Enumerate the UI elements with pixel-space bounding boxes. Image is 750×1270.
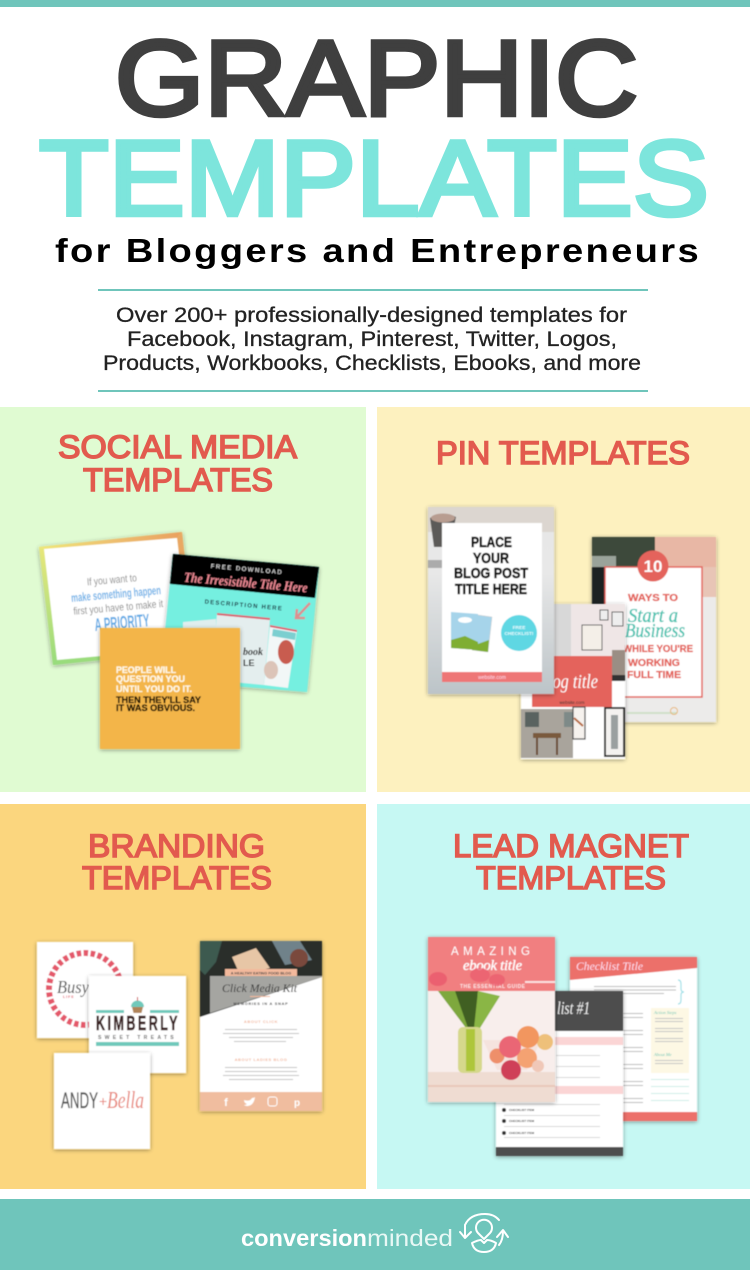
pin card: blog title: blog title [540,671,598,693]
panel: branding templates [0,804,366,1189]
pin card: place your blog post title here: CHECKLIST! [504,631,534,637]
media kit card: MEMORIES IN A SNAP [233,1002,289,1006]
social quote card: priority: A PRIORITY [94,610,150,635]
intro text block: Over 200+ professionally-designed templates for [116,303,627,327]
ebook cover card [428,937,555,1102]
pin card: place your blog post title here: PLACE [471,534,512,551]
brand logo card: busy: LIFE [63,995,75,999]
brand logo card: busy [37,942,133,1038]
footer logo wordmark [241,1225,453,1251]
social quote card: people will question you: PEOPLE WILL [116,665,176,675]
ebook cover card: ebook title [463,958,523,974]
social quote card: people will question you: THEN THEY'LL SAY [116,695,201,705]
checklist number one card: CHECKLIST ITEM [509,1108,535,1112]
top accent bar [0,0,750,7]
social quote card: people will question you: QUESTION YOU [116,674,185,684]
pin card: place your blog post title here: TITLE HERE [455,581,527,598]
heading: branding: BRANDING [88,828,265,864]
media kit card: Click Media Kit [222,981,298,995]
social icons row: p [294,1098,300,1109]
media kit card: ABOUT CLICK [244,1019,278,1024]
title: GRAPHIC [115,18,638,138]
brand logo card: kimberly [89,976,186,1073]
footer band [0,1199,750,1270]
ebook cover card: AMAZING [451,946,534,958]
pin card: blog title: website.com [559,700,585,705]
heading: lead magnet: TEMPLATES [476,860,666,896]
heading: social media [58,429,298,498]
brand logo card: andy and bella: Bella [107,1088,144,1114]
brand logo card: andy and bella: ANDY [61,1088,98,1113]
pin card: place your blog post title here [428,507,554,694]
panel: social media templates [0,407,366,792]
media kit card [200,941,322,1111]
icon: person with circular arrows [460,1214,508,1252]
footer logo wordmark: conversion [241,1225,367,1251]
pin card: blog title [521,604,625,759]
media kit card: ABOUT LADIES BLOG [235,1057,287,1062]
social icons row [224,1097,300,1109]
heading: pin templates: PIN TEMPLATES [436,435,690,471]
pin card: 10 ways to start a business: WAYS TO [628,593,678,604]
social quote card: people will question you: UNTIL YOU DO IT. [116,684,192,694]
pin card: 10 ways to start a business: WHILE YOU'RE [623,644,693,655]
social card: free download: The Irresistible Title Here [183,571,308,596]
subtitle: for Bloggers and Entrepreneurs [55,232,701,269]
pin card: 10 ways to start a business: WORKING [628,658,680,669]
intro text block: Facebook, Instagram, Pinterest, Twitter, Logos, [127,327,617,351]
pin card: place your blog post title here: YOUR [473,550,509,567]
social card: free download: book [243,647,263,658]
pin card: place your blog post title here: website.com [478,675,506,681]
pin card: 10 ways to start a business: 10 [644,557,662,576]
brand logo card: busy: Busy [57,977,89,997]
panel: pin templates [377,407,750,792]
heading: branding: TEMPLATES [82,860,272,896]
title [39,18,709,238]
checklist title card: Checklist Title [576,959,644,973]
checklist title card: Action Steps [653,1010,677,1015]
pin card: place your blog post title here: FREE [513,625,526,631]
heading: branding [82,828,272,896]
checklist number one card: list #1 [557,998,590,1018]
panel: lead magnet templates [377,804,750,1189]
pin card: place your blog post title here: BLOG POST [454,565,528,582]
footer logo wordmark: minded [367,1225,453,1251]
ebook cover card: THE ESSENTIAL GUIDE [460,984,526,990]
social quote card: priority: make something happen [71,583,161,605]
pin card: 10 ways to start a business: Start a [628,605,678,627]
heading: social media: TEMPLATES [83,462,273,498]
pin card: 10 ways to start a business [592,537,716,722]
title: TEMPLATES [39,118,709,238]
social card: free download: DESCRIPTION HERE [204,600,283,612]
brand logo card: kimberly: KIMBERLY [96,1013,180,1035]
brand logo card: andy and bella: + [99,1093,107,1109]
checklist title card: About Me [653,1052,672,1057]
social quote card: priority [39,532,195,665]
checklist number one card [496,991,623,1156]
social quote card: priority: first you have to make it [73,598,164,618]
brand logo card: andy and bella [54,1053,150,1149]
heading: lead magnet [453,828,689,896]
pin card: 10 ways to start a business: FULL TIME [627,670,681,681]
social card: free download: LE [243,658,255,668]
pin card: 10 ways to start a business: Business [625,620,685,642]
checklist title card [570,957,697,1121]
heading: lead magnet: LEAD MAGNET [453,828,689,864]
intro text block: Products, Workbooks, Checklists, Ebooks, and more [103,351,641,375]
social card: free download [160,554,319,692]
checklist number one card: CHECKLIST ITEM [509,1131,535,1135]
social quote card: people will question you: IT WAS OBVIOUS. [116,703,195,713]
social icons row: f [224,1097,228,1109]
checklist number one card: CHECKLIST ITEM [509,1119,535,1123]
brand logo card: kimberly: SWEET TREATS [98,1035,177,1041]
intro text block [98,289,648,392]
heading: social media: SOCIAL MEDIA [58,429,298,465]
social quote card: people will question you [100,628,240,749]
media kit card: A HEALTHY EATING FOOD BLOG [231,972,291,976]
social quote card: priority: If you want to [86,572,137,589]
social card: free download: FREE DOWNLOAD [210,564,283,576]
